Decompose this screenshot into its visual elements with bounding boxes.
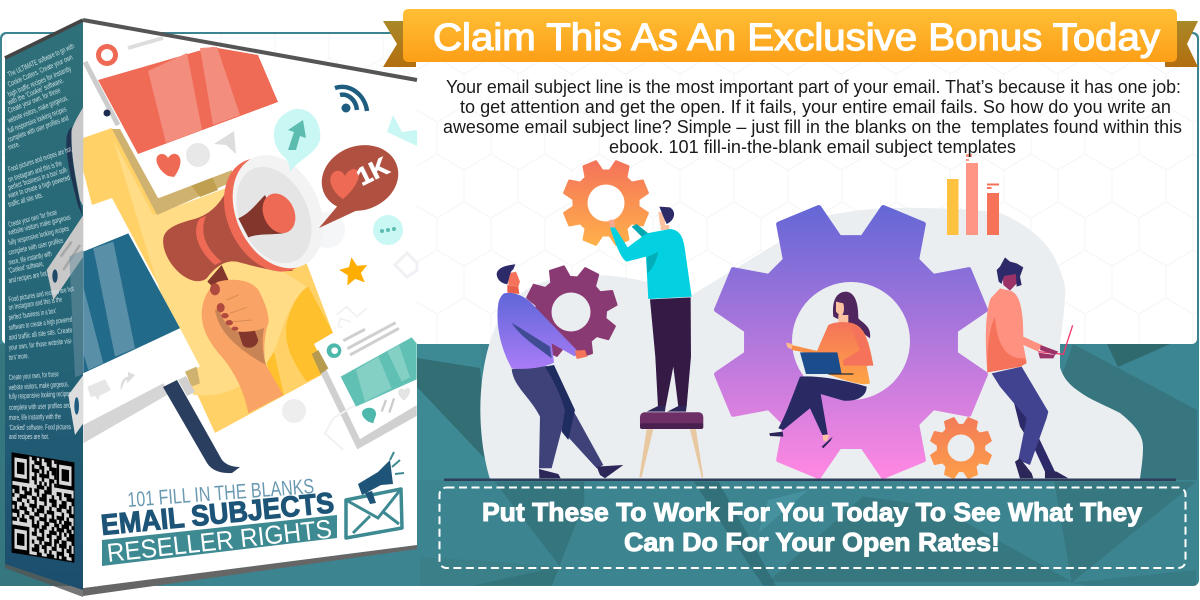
icon: large purple gear [673, 164, 1029, 520]
artwork: phone edge [163, 212, 345, 473]
spine copy text: perfect 'business in a box' soft- [7, 165, 69, 192]
panel: faceted teal lower band [420, 482, 1196, 586]
spine copy text: on Instagram and this is the [7, 158, 63, 184]
figure: man on stool [609, 207, 703, 477]
spine copy text: Create your own 'for those [7, 207, 58, 229]
icon: top orange gear [550, 147, 662, 259]
icon: light crown shape [387, 115, 417, 146]
figure: man with pink laptop [986, 257, 1073, 478]
icon: megaphone [163, 140, 341, 286]
artwork: hand holding megaphone [202, 265, 283, 413]
box title: email subjects: EMAIL SUBJECTS [100, 487, 336, 542]
icon: envelope with megaphone [346, 452, 404, 538]
spine copy text: fully responsive looking recipes [9, 389, 71, 401]
body paragraph: ebook. 101 fill-in-the-blank email subject templates [609, 136, 1016, 157]
ribbon left tail [383, 21, 416, 67]
body paragraph: Your email subject line is the most important part of your email. That’s because it has one job: [446, 76, 1181, 97]
QR code [12, 453, 74, 562]
spine copy text: Create your own, for those [6, 86, 62, 115]
product box [5, 20, 417, 597]
icon: star [339, 257, 367, 286]
spine copy text: website visitors make gorgeous [7, 212, 72, 237]
banner ribbon [383, 9, 1198, 67]
spine copy text: Create your own, for those [8, 369, 59, 382]
icon: plum gear carried by man [510, 251, 632, 373]
spine copy text: Food pictures and recipes are hot [8, 284, 75, 304]
spine copy text: complete with user profiles and [7, 113, 70, 144]
spine copy text: more, life instantly with [8, 249, 52, 267]
spine copy text: traffic all site sits. [7, 190, 44, 209]
spine copy text: with the 'Cookie' software. [6, 76, 65, 107]
spine copy text [6, 41, 76, 441]
icon: small orange gear [921, 408, 1001, 488]
icon: faint diamond [395, 253, 417, 277]
spine copy text: and recipes are hot. [8, 268, 49, 285]
icon: like bubble 1K [312, 135, 408, 228]
bar chart [947, 154, 999, 235]
box title: 101 fill in the blanks: 101 FILL IN THE BLANKS [127, 475, 315, 512]
icon: chat dots [373, 215, 403, 245]
spine copy text: complete with user profiles [7, 236, 64, 257]
body paragraph: awesome email subject line? Simple – just fill in the blanks on the templates found within this [443, 116, 1182, 137]
spine copy text: and traffic all site sits. Create [8, 325, 73, 342]
callout text line 2: Can Do For Your Open Rates! [624, 527, 1000, 557]
box spine [5, 20, 83, 590]
spine copy text: Food pictures and recipes are hot [7, 144, 73, 174]
artwork: poster [78, 128, 333, 433]
body paragraph: to get attention and get the open. If it fails, your entire email fails. So how do you write an [460, 96, 1171, 117]
spine copy text: more. [7, 139, 21, 152]
spine copy text: and recipes are hot. [9, 432, 49, 441]
artwork: right teal social card [312, 283, 417, 450]
callout text line 1: Put These To Work For You Today To See What They [482, 497, 1143, 527]
figure: man carrying gear [497, 264, 623, 478]
artwork: top social card [85, 38, 278, 215]
spine copy text: website visitors, make gorgeous, [6, 93, 69, 125]
spine copy text: full responsive looking recipes [7, 104, 68, 135]
background blob behind figures [480, 208, 1143, 479]
spine copy text: The ULTIMATE software to go with [6, 41, 76, 79]
icon: like bubble 1K: 1K [352, 152, 393, 191]
box front face [83, 20, 417, 588]
floor line [444, 478, 1176, 481]
spine copy text: fully responsive looking recipes [7, 224, 70, 247]
icon: upload arrow bubble [274, 109, 320, 172]
ribbon main [403, 9, 1177, 62]
spine copy text: your own, for those website visi- [8, 336, 73, 352]
spine copy text: on Instagram and this is the [8, 295, 63, 312]
spine copy text: more, life instantly with the [9, 412, 61, 422]
spine copy text: tors' more. [8, 351, 29, 362]
spine copy text: complete with user profiles and [9, 401, 71, 412]
spine copy text: ware to create a high powered [6, 173, 71, 200]
spine copy text: software to create a high powered [8, 314, 73, 332]
artwork: lower-left card, blue image and spine overlays [47, 107, 200, 443]
spine copy text: high traffic recipes for instantly [6, 64, 73, 99]
spine copy text: perfect 'business in a box' [8, 306, 57, 322]
spine copy text: 'Cooked' software, [8, 259, 45, 275]
spine copy text: Cookie Cutters. Create your own [6, 53, 74, 89]
heading: Claim This As An Exclusive Bonus Today [433, 17, 1160, 59]
spine copy text: website visitors, make gorgeous, [8, 379, 69, 392]
callout: dashed box [440, 488, 1186, 568]
ribbon right tail [1165, 21, 1198, 67]
icon: wifi [335, 87, 367, 112]
figure: woman with laptop [769, 292, 873, 448]
box edges [5, 20, 417, 80]
box shadow base [5, 545, 417, 597]
body paragraph [443, 76, 1182, 157]
spine copy text: 'Cooked' software. Food pictures [9, 422, 71, 432]
box title: reseller rights band: RESELLER RIGHTS [105, 513, 333, 568]
